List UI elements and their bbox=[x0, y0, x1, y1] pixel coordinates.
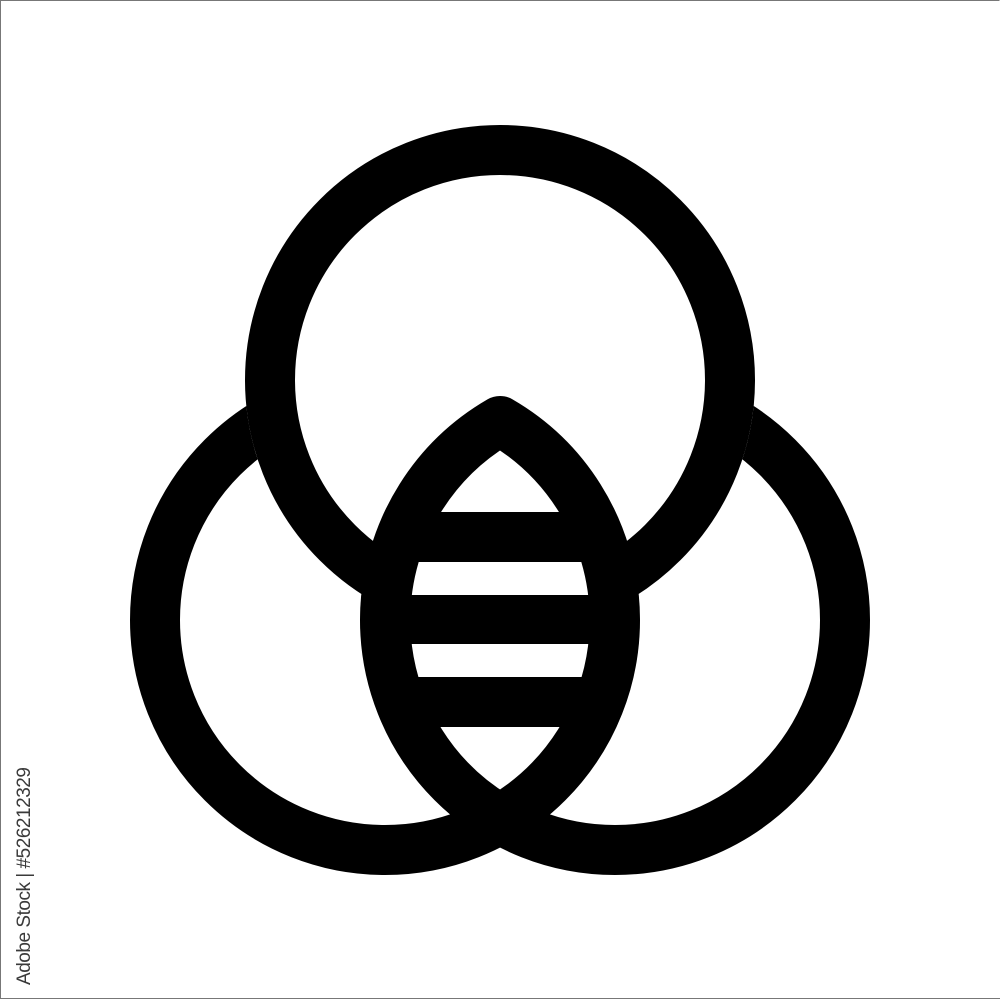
right ring bbox=[385, 390, 845, 850]
lens outline bbox=[385, 421, 615, 819]
left ring bbox=[155, 390, 615, 850]
top ring bbox=[270, 150, 730, 610]
stock id caption: Adobe Stock | #526212329 bbox=[14, 767, 35, 985]
icon: three overlapping rings with striped lens bbox=[155, 125, 845, 850]
lens interior bbox=[385, 421, 615, 819]
lens stripes bbox=[385, 512, 615, 727]
top disc mask bbox=[245, 125, 755, 635]
